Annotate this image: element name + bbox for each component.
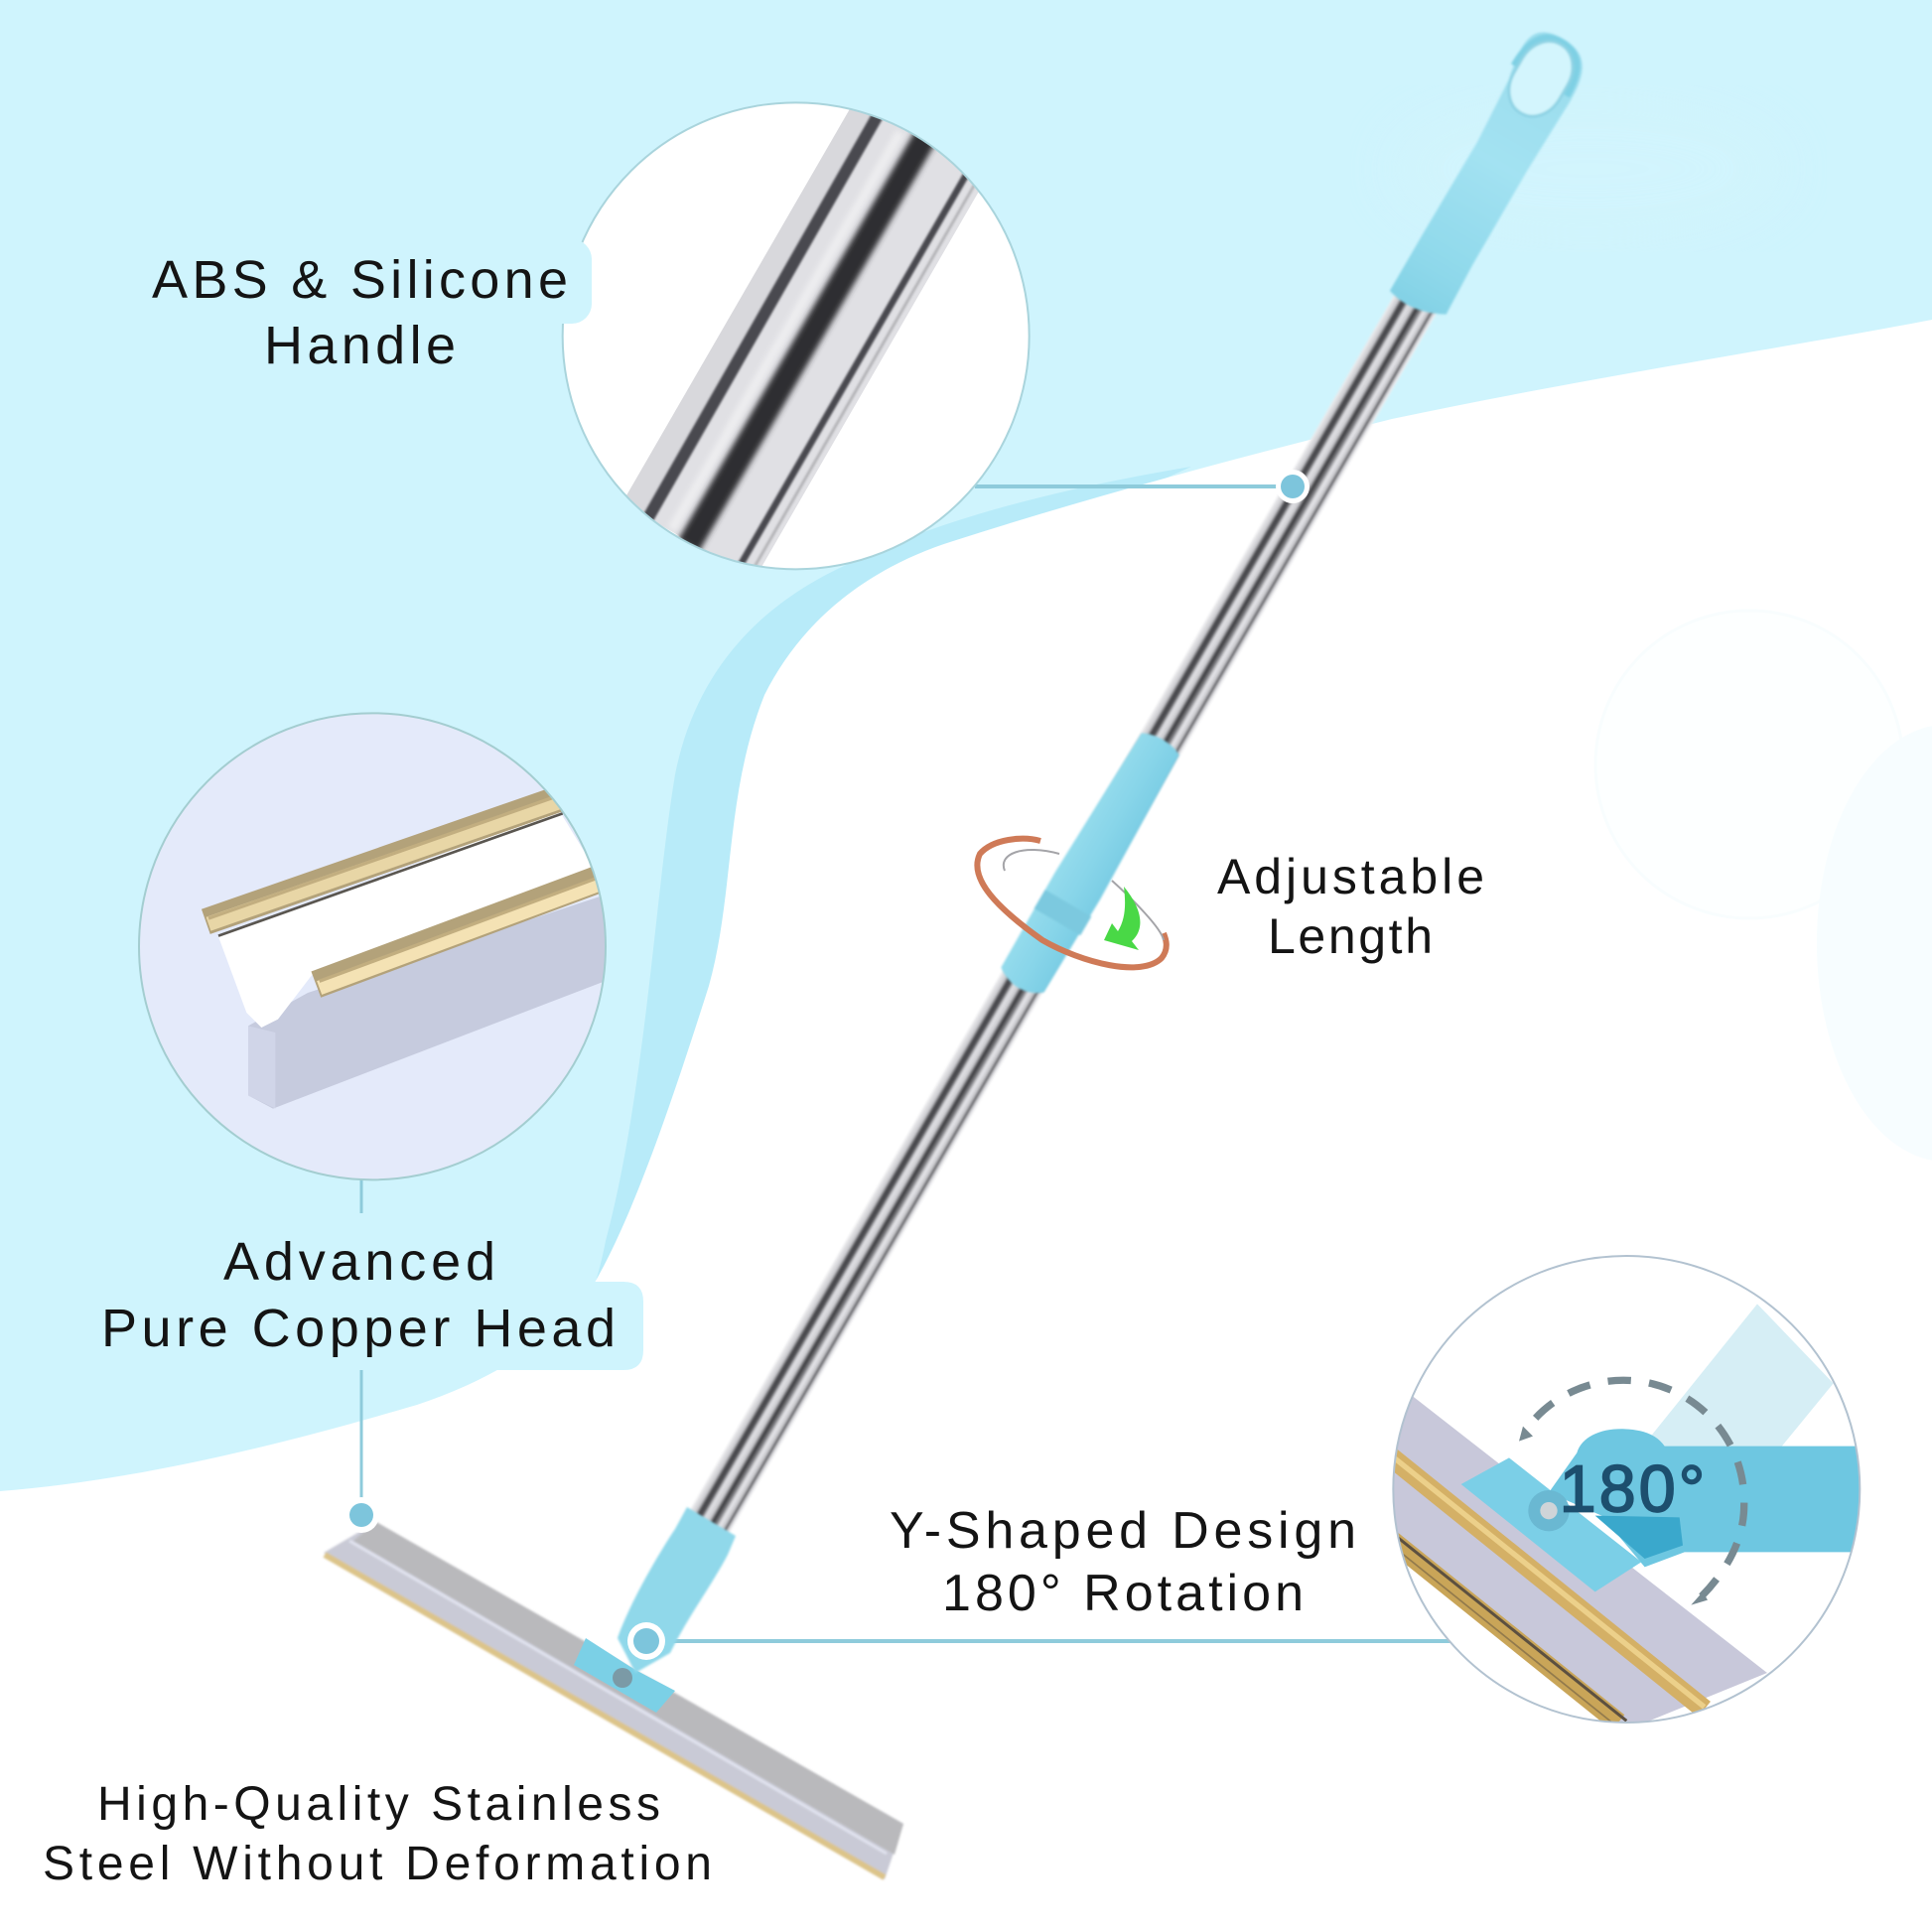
dashed rotation arc (1536, 1380, 1744, 1601)
label: stainless steel (43, 1778, 712, 1890)
label: ABS and silicone handle: ABS & Silicone (152, 250, 568, 310)
adjust rotation ring (977, 839, 1167, 967)
blade bracket (574, 1638, 675, 1713)
label: ABS and silicone handle: Handle (264, 316, 456, 375)
label: Y-shaped design: Y-Shaped Design (890, 1502, 1356, 1560)
detail circle: stainless pole (563, 99, 1030, 579)
shaded wedge (1595, 1516, 1683, 1559)
connector line: rotation circle to joint (665, 1639, 1454, 1643)
squeegee mop (324, 23, 1595, 1879)
connector line: head circle to blade (359, 1176, 363, 1504)
label: stainless steel: Steel Without Deformation (43, 1838, 712, 1890)
marker dot: pole (1276, 470, 1310, 503)
label: ABS and silicone handle (152, 250, 568, 375)
detail circle: copper head (139, 713, 609, 1179)
label: adjustable length (1217, 849, 1484, 964)
label: stainless steel: High-Quality Stainless (97, 1778, 660, 1831)
label: adjustable length: Adjustable (1217, 849, 1484, 904)
label backing: handle (119, 239, 592, 324)
background: mid blue wave band (571, 467, 1191, 1330)
green arrow (1104, 887, 1140, 950)
top handle with hanging loop (1380, 23, 1595, 325)
screw (1528, 1490, 1570, 1531)
squeegee blade (324, 1522, 903, 1879)
detail circle: 180 degree rotation (1390, 1256, 1863, 1730)
label: advanced pure copper head: Advanced (223, 1232, 495, 1292)
rotating arm (1549, 1429, 1863, 1567)
label: Y-shaped design (890, 1502, 1356, 1622)
blade socket (618, 1507, 736, 1673)
180 degree label: 180° (1560, 1453, 1705, 1527)
marker dot: blade (344, 1497, 379, 1533)
label: advanced pure copper head (101, 1232, 616, 1358)
label backing: copper head (99, 1213, 643, 1370)
background: faint decorative shapes (1390, 99, 1932, 1162)
bracket screw (613, 1668, 632, 1688)
telescopic grip (996, 726, 1186, 1002)
label: adjustable length: Length (1268, 908, 1433, 964)
bracket plate (1461, 1457, 1641, 1591)
arc arrow heads (1519, 1427, 1708, 1605)
pole (667, 23, 1595, 1555)
label: Y-shaped design: 180° Rotation (942, 1565, 1304, 1622)
connector line: handle circle to pole (975, 484, 1283, 488)
label: advanced pure copper head: Pure Copper Head (101, 1299, 616, 1358)
marker dot: joint (627, 1622, 665, 1660)
